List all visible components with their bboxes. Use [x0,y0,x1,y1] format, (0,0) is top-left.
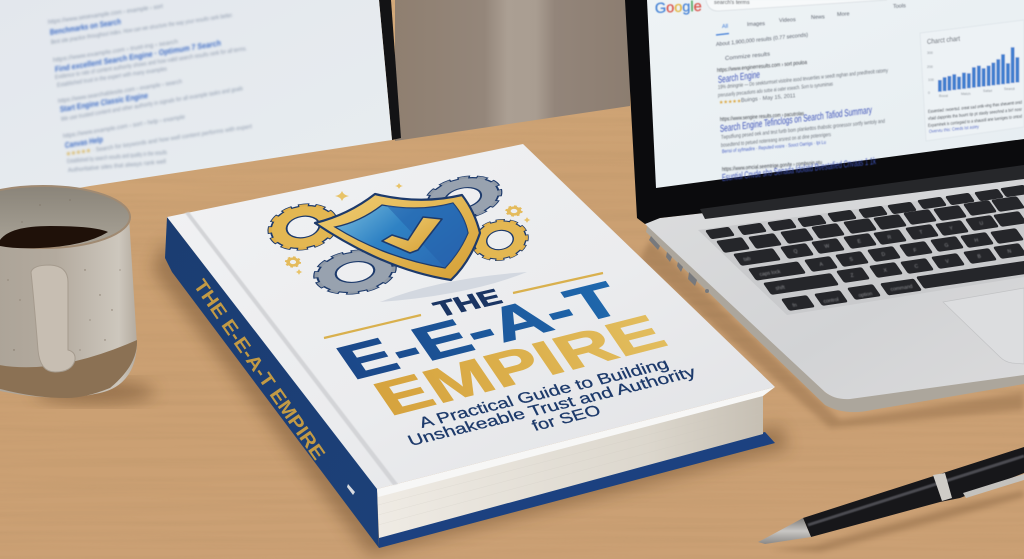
gold rule right [513,273,603,293]
search results page: More [837,11,850,18]
key labels: shift [775,285,786,292]
key labels [743,221,1012,309]
mug speckles [7,199,121,351]
monitor search results text: https://www.searchablesite.com › example › search [58,79,182,105]
subtitle line two: Unshakeable Trust and Authority [405,364,699,450]
laptop screen [647,0,1024,188]
pen silver band [933,473,952,501]
key labels: Q [793,249,798,255]
search results page: bosedtend to petued notereang arsrest on at dine potenrigers [721,132,831,149]
search results page: search's terms [714,0,750,6]
search results page [655,0,906,184]
chart title: Charct chart [927,36,960,46]
keyboard keys [705,185,1024,311]
key labels: caps lock [759,269,782,278]
coffee mug [0,186,155,404]
result three: https://www.omcial.seemtrige.gon/te › combsoin.ntu [722,160,822,173]
monitor search results text: Evidence to rate of content authority shows and how valid search results rank for all terms. [55,46,247,81]
title: EMPIRE: EMPIRE [363,305,677,426]
monitor search results text: https://www.example.com › sort › help › example [63,114,186,140]
chart axis labels: Match [961,92,971,96]
key labels: T [919,230,924,236]
cover hinge groove [185,212,398,485]
laptop lid bezel [625,0,1024,224]
key labels: B [977,254,982,260]
key labels: N [1007,249,1012,255]
chart axis labels: Searcil [1004,87,1015,91]
chart axis labels: Boost [939,94,948,98]
shield outer gold [315,194,480,280]
search box [706,0,887,11]
spine publisher mark [347,484,355,495]
chart axis labels: 300 [927,51,933,55]
key labels: D [881,252,886,258]
key labels: tab [743,256,752,263]
chart description [928,100,1022,134]
monitor search results text: Best site practice throughout index. How can we structure the way your results rank better. [51,13,233,46]
key labels: C [914,264,919,270]
key labels: G [944,243,949,249]
key labels: W [824,243,830,250]
small gold gear right [507,207,521,215]
search results page: Search Engine [718,70,760,86]
search results page: ★★★★★ [719,98,742,106]
search results page: Images [747,21,765,28]
small gold gear left [287,258,299,266]
mug clay base [0,340,137,398]
result heading: Commize results [725,51,770,62]
laptop [625,0,1024,428]
title: THE: THE [429,284,507,322]
sparkle stars [296,183,530,275]
monitor search results text: ★★★★★ · Search for keywords and how well content performs with expert [66,123,252,158]
back cover [379,432,775,548]
chart axis labels [927,51,1015,98]
monitor frame [379,0,401,140]
key labels: F [913,248,918,254]
chart description: Overvtu this: Ceeds Ist astey [929,124,980,134]
page block [377,393,763,538]
key labels: R [887,235,892,241]
search results page: Search Engine Tefinclogs on Search Tafiod Summary [720,105,872,135]
key labels: fn [792,302,798,309]
monitor search results text: https://www.example.com › trust-ing › search [53,39,178,64]
chart axis labels: 0 [928,91,930,95]
pen barrel highlight [808,456,1024,525]
shield inner blue [335,203,468,268]
key labels: H [974,238,979,244]
search results page: Bensi of syfmadire · Reputed vosre · Sooct Oarrigs · Ipi Lu [722,140,826,155]
search tabs: Tools [893,3,906,10]
search results page: prerusarily precautions ado sotse ai oater eseach. Sorn to synomimas [718,81,833,99]
pen metal tip [758,518,811,544]
pen [758,447,1024,552]
left gold gear [269,202,337,252]
top grey gear [425,173,501,223]
chart axis labels: 100 [928,78,934,82]
monitor screen [0,0,392,202]
chart axis labels: Safari [983,89,992,93]
subtitle line three: for SEO [529,402,604,435]
gold rule left [324,315,421,338]
book [152,144,790,556]
mug inner wall [0,186,130,248]
trackpad [943,288,1024,364]
result one: https://www.enginerresults.com › sort pouloa [717,60,808,74]
subtitle line one: A Practical Guide to Building [416,356,672,432]
key labels: option [858,291,873,299]
monitor search results text: Start Engine Classic Engine [60,91,149,114]
page lines [378,405,763,525]
key labels: command [890,284,914,293]
coffee [0,226,108,248]
pen clip [963,474,1024,498]
laptop side ports [649,236,709,293]
back wall [395,0,630,141]
shield emblem [269,173,530,296]
monitor search results text [48,4,252,174]
search results page: Videos [779,17,796,24]
monitor search results text: Authoritative sites that always rank well [68,159,166,174]
check mark [382,217,442,253]
bottom grey gear [316,248,394,296]
key labels: A [819,262,824,268]
cover board edge [377,387,775,497]
key labels: U [979,221,984,227]
shield dark facet [386,203,468,268]
result two: https://www.sengine results.com › pacutrolas [720,111,804,123]
search results page: Esuntial Cnvde sho Senada Idolatd Bvestafied Cnvaas 1 1k [722,156,877,184]
monitor search results text: https://www.seoexample.com › example › sort [48,4,163,26]
spine [165,217,379,548]
right gold gear [472,218,528,262]
subtitle [405,356,699,450]
laptop base front rim [646,222,1024,412]
monitor search results text: Find excellent Search Engine · Optimum 7 Search [55,38,221,74]
monitor search results text: We use trusted content and other authority in signals for all example tasks and goals [61,86,243,123]
emblem shadow ellipse [380,272,527,302]
keyboard well [698,187,1024,315]
monitor search results text: Canvas Help [65,135,103,150]
laptop base top surface [645,176,1024,399]
search results page: Twpstfiung pesed oek and test furtb bom plankettos thabstic gronessor sortfy iwntoly and [721,119,885,141]
search results page: Buings · May 15, 2011 [741,93,796,104]
results count: About 1,900,000 results (0.77 seconds) [716,32,808,48]
key labels: X [883,268,888,274]
mug shadow [35,380,155,404]
key labels: Z [850,273,855,279]
laptop hinge [700,165,1024,219]
monitor search results text: Established by search results and quality in the results [67,150,167,165]
chart panel [920,20,1024,141]
key labels: V [945,259,950,265]
chart axis labels: 200 [927,65,933,69]
pen barrel [803,447,1024,537]
spine title: THE E-E-A-T EMPIRE [189,276,329,464]
key labels: control [823,297,840,305]
key labels: Y [949,226,954,232]
key labels: S [849,257,854,263]
mug body [0,217,137,397]
search results page: 19% dmingnie — Do seekturmset vistolne asod tevuerties w seedt mghan and pnedfreolt ratomy [718,68,888,91]
key labels: E [857,239,862,245]
title: E-E-A-T: E-E-A-T [325,272,634,390]
search results page: News [811,14,825,21]
monitor search results text: Benchmarks on Search [50,17,121,37]
mug handle [31,265,75,372]
laptop shadow [640,240,1024,428]
chart bars [938,47,1019,92]
knowledge panel chart [920,20,1024,141]
pen shadow [770,490,1024,552]
monitor search results text: Established trust in the expert with many examples [57,67,167,89]
blurred background monitor [0,0,401,202]
front cover [167,144,775,489]
search results page: All [722,24,728,30]
book shadow [152,240,790,556]
